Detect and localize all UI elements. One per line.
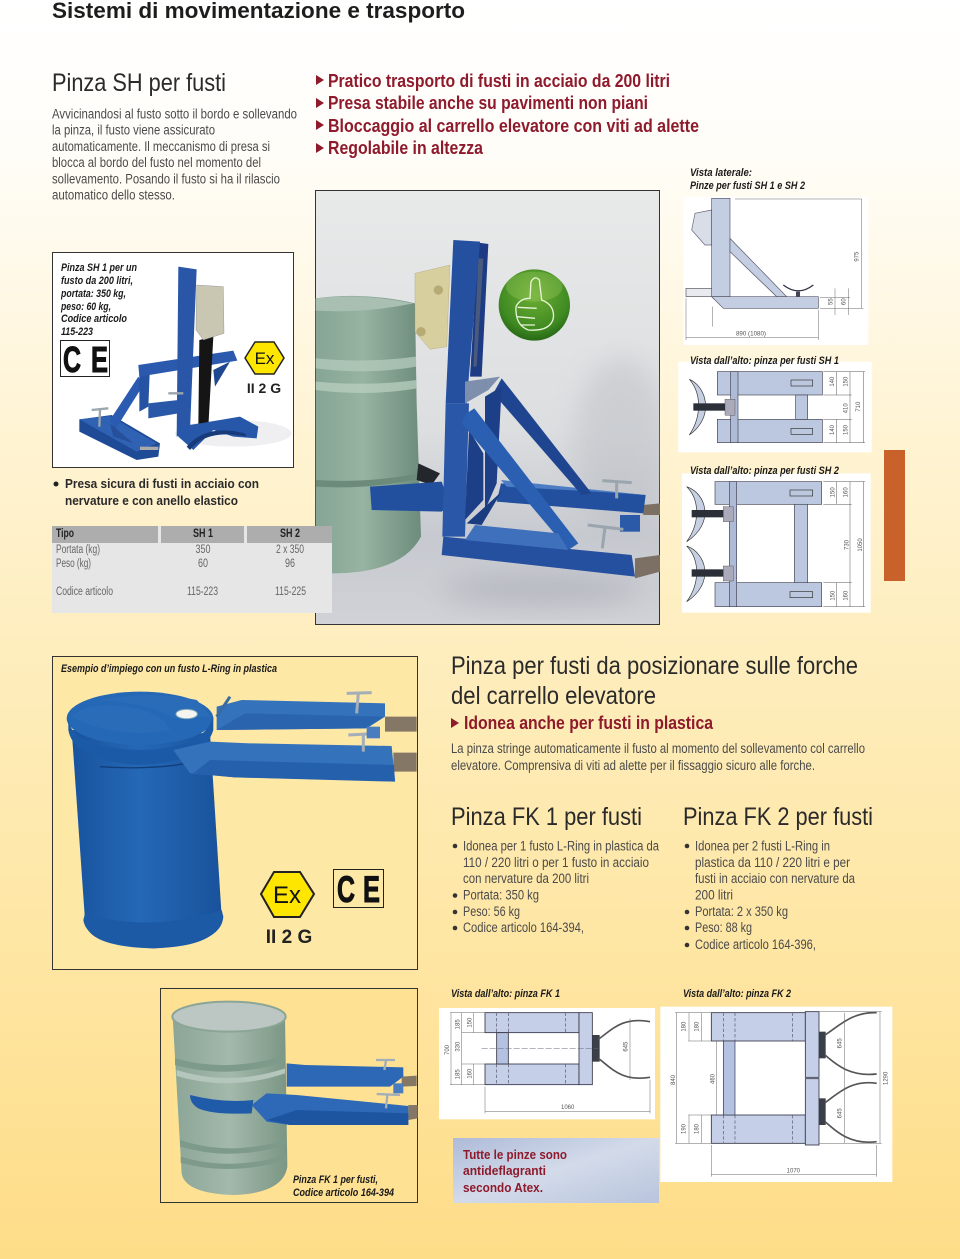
list: FK 1 features: Idonea per 1 fusto L-Ring in plastica da	[463, 838, 659, 854]
icon: CE mark: C	[63, 339, 81, 380]
list: FK 1 features: Codice articolo 164-394,	[463, 920, 584, 935]
labels: side view: Vista laterale:	[690, 167, 752, 179]
heading: FK 2: Pinza FK 2 per fusti	[683, 803, 873, 831]
icon: CE mark: E	[363, 869, 380, 910]
text block: forklift clamp description: La pinza stringe automaticamente il fusto al momento del sollevamento col carrello	[451, 741, 865, 756]
technical drawing: top view FK 1: 185	[456, 1019, 462, 1029]
column: FK 1	[451, 803, 659, 935]
icon: Ex II 2 G	[245, 342, 284, 396]
photo panel: FK 1 clamp on steel drum	[160, 988, 418, 1202]
technical drawing: side view: 890 (1080)	[736, 332, 766, 338]
technical drawing: top view FK 2: 645	[838, 1038, 844, 1048]
heading: Pinza SH per fusti: Pinza SH per fusti	[52, 69, 226, 97]
text block: description of SH clamp: Avvicinandosi al fusto sotto il bordo e sollevando	[52, 106, 297, 122]
spec table: Portata (kg)	[56, 544, 100, 556]
labels: side view: Pinze per fusti SH 1 e SH 2	[690, 180, 805, 192]
technical drawing: side view: 55	[829, 298, 835, 305]
main photo: drum clamp on green drum	[316, 190, 668, 624]
technical drawing: top view SH 2: 160	[844, 487, 850, 497]
label: top view SH 2: Vista dall’alto: pinza per fusti SH 2	[690, 465, 839, 477]
technical drawing: top view SH 2: 150	[831, 487, 837, 497]
spec table	[52, 526, 332, 613]
label: top view FK 1: Vista dall’alto: pinza FK 1	[451, 988, 560, 1000]
list: FK 2 features: Codice articolo 164-396,	[695, 937, 816, 952]
photo panel: L-Ring plastic drum example	[52, 656, 418, 970]
list: FK 2 features: Peso: 88 kg	[695, 920, 752, 935]
callout: ATEX note: Tutte le pinze sono	[463, 1147, 567, 1162]
feature list in red with arrows: Regolabile in altezza	[328, 138, 484, 158]
text block: forklift clamp description: elevatore. Comprensiva di viti ad alette per il fissaggio sicuro alle forche.	[451, 758, 815, 773]
feature list in red with arrows: Bloccaggio al carrello elevatore con viti ad alette	[328, 116, 699, 136]
bullet: safe grip	[54, 476, 259, 508]
feature list in red with arrows: Presa stabile anche su pavimenti non piani	[328, 93, 648, 113]
spec table: 60	[198, 558, 208, 570]
list: FK 1 features	[453, 838, 659, 935]
technical drawing: top view SH 1: 410	[844, 403, 850, 413]
technical drawing: top view SH 2: 730	[845, 539, 851, 550]
technical drawing: top view FK 2: 180	[682, 1021, 688, 1032]
technical drawing: top view FK 2: 840	[671, 1074, 677, 1085]
technical drawing: top view FK 1: 1060	[561, 1105, 575, 1111]
caption: SH 1 specs: fusto da 200 litri,	[61, 275, 133, 287]
text block: description of SH clamp: automatico dello stesso.	[52, 188, 175, 202]
technical drawing: top view SH 2: 1050	[858, 538, 864, 552]
list: FK 2 features: Idonea per 2 fusti L-Ring in	[695, 838, 830, 854]
technical drawing: top view SH 1: 150	[844, 376, 850, 387]
callout: ATEX note: antideflagranti	[463, 1163, 546, 1178]
technical drawing: top view FK 2: 180	[694, 1123, 700, 1134]
caption: FK 1: Pinza FK 1 per fusti,	[293, 1174, 378, 1186]
technical drawing: top view SH 2	[682, 473, 871, 613]
icon: Ex II 2 G	[261, 872, 314, 948]
list: FK 2 features	[685, 838, 855, 952]
spec table: Tipo	[56, 528, 74, 540]
list: FK 2 features: Portata: 2 x 350 kg	[695, 904, 788, 919]
icon: Ex II 2 G: Ex	[273, 882, 301, 909]
caption: SH 1 specs: Pinza SH 1 per un	[61, 262, 137, 274]
heading: FK 1: Pinza FK 1 per fusti	[451, 803, 642, 831]
label: top view SH 1: Vista dall’alto: pinza per fusti SH 1	[690, 355, 839, 367]
bullet: safe grip: Presa sicura di fusti in acciaio con	[65, 476, 259, 491]
heading: forklift clamp: del carrello elevatore	[451, 682, 656, 710]
text block: forklift clamp description	[451, 741, 865, 773]
list: FK 2 features: 200 litri	[695, 888, 733, 902]
technical drawing: top view SH 2: 160	[844, 590, 850, 601]
photo panel: SH 1 clamp	[52, 252, 294, 468]
technical drawing: top view FK 1: 160	[468, 1068, 474, 1079]
technical drawing: top view FK 2: 180	[694, 1021, 700, 1032]
bullet: safe grip: nervature e con anello elastico	[65, 493, 238, 508]
technical drawing: top view SH 1: 140	[830, 376, 836, 387]
text block: description of SH clamp: la pinza, il fusto viene assicurato	[52, 122, 215, 138]
technical drawing: side view: 60	[841, 298, 847, 305]
caption: SH 1 specs: 115-223	[61, 326, 93, 338]
technical drawing: top view FK 2	[660, 1007, 892, 1182]
icon: CE mark	[334, 869, 384, 910]
caption: example of use: Esempio d’impiego con un fusto L-Ring in plastica	[61, 663, 277, 675]
list: FK 2 features: fusti in acciaio con nervature da	[695, 871, 855, 886]
label: top view FK 2: Vista dall’alto: pinza FK 2	[683, 988, 791, 1000]
feature list in red with arrows: Pratico trasporto di fusti in acciaio da 200 litri	[328, 71, 670, 91]
callout: ATEX note: secondo Atex.	[463, 1180, 543, 1195]
column: FK 2	[683, 803, 873, 952]
text block: description of SH clamp	[52, 106, 297, 202]
icon: Ex II 2 G: II 2 G	[247, 380, 281, 396]
technical drawing: top view FK 1: 700	[445, 1044, 451, 1055]
caption: FK 1	[293, 1174, 394, 1199]
technical drawing: top view FK 1	[439, 1008, 655, 1119]
technical drawing: top view SH 1	[678, 362, 872, 452]
technical drawing: top view FK 1: 330	[456, 1041, 462, 1052]
spec table: Codice articolo	[56, 586, 113, 598]
spec table: 96	[285, 558, 295, 570]
icon: Ex II 2 G: II 2 G	[266, 927, 312, 948]
technical drawing: side view	[683, 197, 868, 345]
icon: Ex II 2 G: Ex	[255, 349, 275, 368]
caption: FK 1: Codice articolo 164-394	[293, 1187, 394, 1199]
icon: CE mark	[60, 339, 110, 380]
technical drawing: top view SH 1: 150	[844, 424, 850, 435]
technical drawing: side view: 975	[855, 251, 861, 262]
text block: description of SH clamp: sollevamento. Posando il fusto si ha il rilascio	[52, 172, 280, 186]
technical drawing: top view FK 2: 1070	[787, 1169, 801, 1175]
technical drawing: top view FK 1: 645	[624, 1041, 630, 1052]
text block: description of SH clamp: blocca al bordo del fusto nel momento del	[52, 155, 261, 170]
list: FK 2 features: plastica da 110 / 220 litri e per	[695, 855, 850, 870]
text block: description of SH clamp: automaticamente. Il meccanismo di presa si	[52, 139, 270, 154]
caption: SH 1 specs: Codice articolo	[61, 313, 127, 325]
spec table: Peso (kg)	[56, 558, 91, 570]
technical drawing: top view FK 2: 190	[682, 1123, 688, 1134]
spec table: 115-225	[275, 586, 306, 598]
feature list in red with arrows	[316, 71, 699, 158]
spec table: SH 1	[193, 528, 213, 540]
list: FK 1 features: con nervature da 200 litri	[463, 871, 589, 886]
spec table: 2 x 350	[276, 544, 304, 556]
technical drawing: top view SH 2: 150	[831, 590, 837, 601]
list: FK 1 features: Portata: 350 kg	[463, 888, 539, 902]
spec table: 115-223	[187, 586, 218, 598]
technical drawing: top view FK 2: 460	[710, 1073, 716, 1084]
caption: SH 1 specs: peso: 60 kg,	[60, 301, 111, 313]
caption: SH 1 specs	[60, 262, 137, 338]
technical drawing: top view FK 1: 150	[468, 1017, 474, 1028]
icon: CE mark: E	[91, 339, 108, 380]
feature: suitable for plastic drums: Idonea anche per fusti in plastica	[464, 713, 714, 733]
list: FK 1 features: 110 / 220 litri o per 1 fusto in acciaio	[463, 855, 649, 870]
technical drawing: top view SH 1: 140	[830, 424, 836, 435]
technical drawing: top view FK 1: 185	[456, 1069, 462, 1079]
heading: forklift clamp	[451, 652, 858, 710]
technical drawing: top view SH 1: 710	[856, 401, 862, 412]
technical drawing: top view FK 2: 1290	[884, 1071, 890, 1085]
icon: CE mark: C	[337, 869, 355, 910]
spec table: 350	[196, 544, 210, 556]
spec table: SH 2	[280, 528, 300, 540]
caption: SH 1 specs: portata: 350 kg,	[60, 288, 126, 300]
callout: ATEX note	[453, 1138, 659, 1203]
list: FK 1 features: Peso: 56 kg	[463, 904, 520, 919]
heading: forklift clamp: Pinza per fusti da posizionare sulle forche	[451, 652, 858, 680]
labels: side view	[690, 167, 805, 192]
technical drawing: top view FK 2: 645	[838, 1108, 844, 1118]
orange side tab	[884, 450, 905, 581]
